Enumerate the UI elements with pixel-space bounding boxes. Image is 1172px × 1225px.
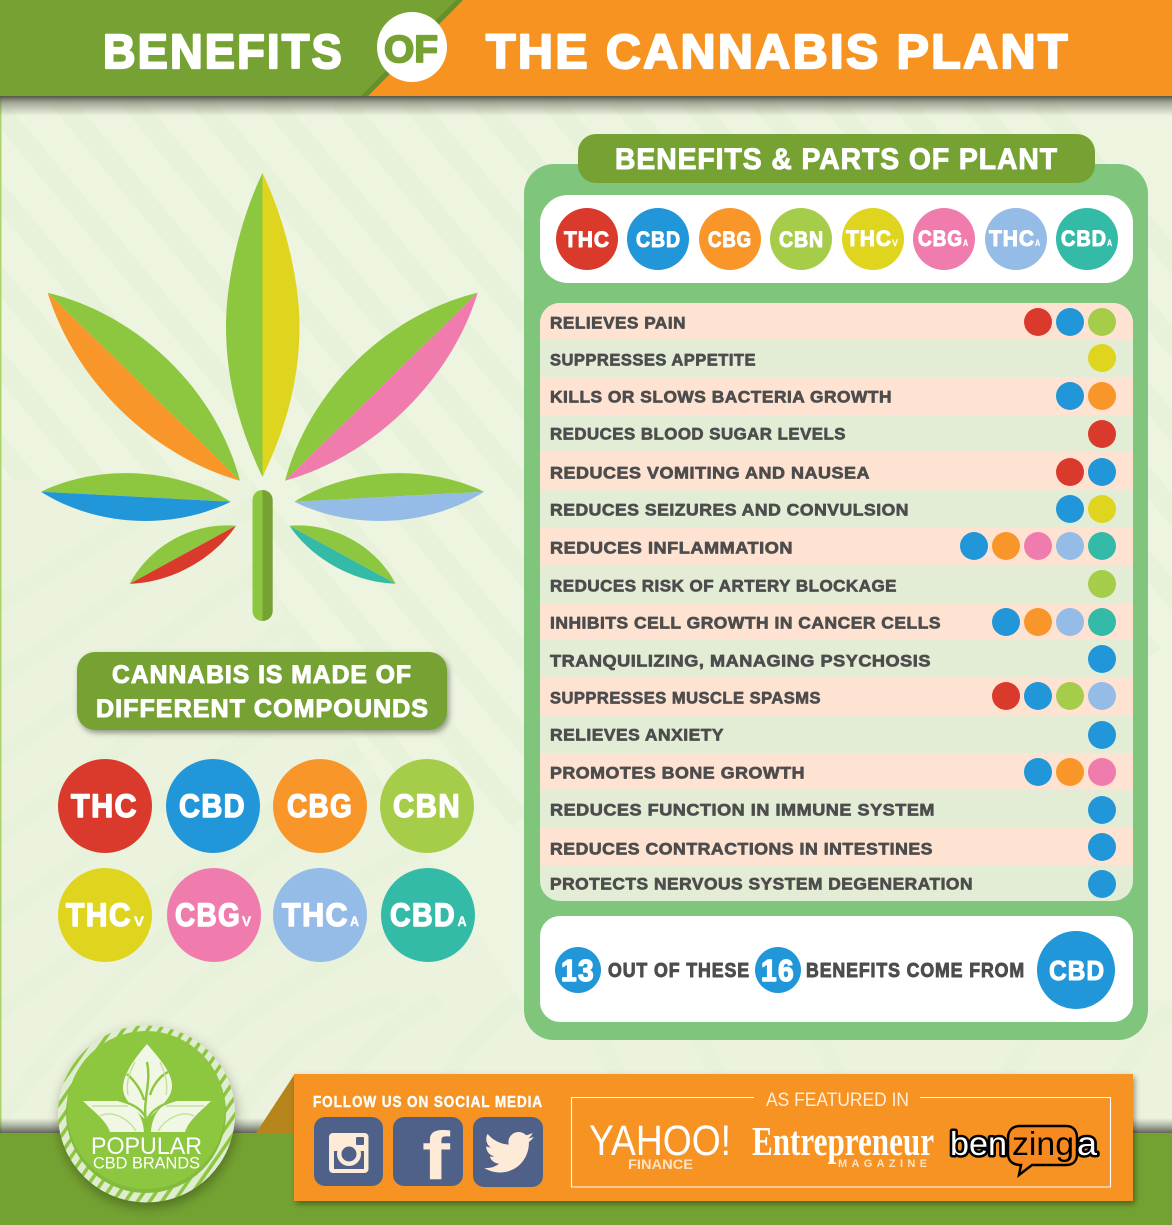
panel heading: BENEFITS & PARTS OF PLANT: [615, 143, 1058, 176]
badge disc: [67, 1031, 225, 1189]
logo: yahoo finance: FINANCE: [628, 1157, 693, 1172]
summary callout: [540, 916, 1133, 1022]
number 13: [555, 947, 601, 993]
row 10: TRANQUILIZING, MANAGING PSYCHOSIS: [550, 652, 931, 670]
header green: [0, 0, 463, 96]
THC: [58, 759, 152, 853]
compound legend: [540, 195, 1133, 283]
row 2: [550, 344, 1116, 372]
row 5: REDUCES VOMITING AND NAUSEA: [550, 464, 870, 482]
THCv: [58, 868, 152, 962]
legend CBD: CBD: [636, 227, 681, 252]
legend THCa: A: [1035, 238, 1041, 248]
CBGv: CBG: [175, 897, 241, 933]
footer orange panel: [294, 1074, 1133, 1201]
panel heading: [578, 134, 1095, 183]
CBDa: [381, 868, 475, 962]
compound circles: [58, 759, 475, 962]
panel background: [524, 164, 1148, 1040]
footer green: [0, 1133, 1172, 1225]
legend CBG: [699, 208, 761, 270]
logo: benzinga: a: [1077, 1125, 1098, 1162]
lower background wash: [0, 480, 1172, 1132]
badge ring: [58, 1026, 235, 1202]
number 16: 16: [761, 953, 795, 988]
diagonal shade: [361, 0, 463, 96]
row 15: [540, 828, 1133, 865]
logo: benzinga: [950, 1125, 1098, 1175]
upper right leaf: [285, 293, 478, 481]
stem: [252, 490, 273, 621]
row 7: REDUCES INFLAMMATION: [550, 538, 793, 558]
follow us text: FOLLOW US ON SOCIAL MEDIA: [313, 1094, 543, 1111]
CBDa: A: [458, 913, 468, 929]
footer band: [0, 1118, 1172, 1225]
icon: twitter: [473, 1117, 543, 1187]
legend CBGa: [913, 208, 975, 270]
legend CBDa: CBD: [1061, 226, 1107, 251]
footer panel fold: [256, 1075, 294, 1133]
upper left leaf: [48, 293, 240, 481]
row 14: [550, 796, 1116, 824]
CBG: [273, 759, 367, 853]
row 9: INHIBITS CELL GROWTH IN CANCER CELLS: [550, 614, 941, 632]
row 13: PROMOTES BONE GROWTH: [550, 764, 805, 782]
THCv: THC: [66, 897, 132, 933]
row 8: [550, 570, 1116, 598]
CBD: CBD: [179, 788, 246, 824]
legend CBDa: A: [1107, 238, 1113, 248]
table base: [540, 303, 1133, 901]
legend THCa: [985, 208, 1047, 270]
badge text popular: POPULAR: [91, 1133, 202, 1160]
as featured in frame: [572, 1098, 1110, 1187]
lower right leaf: [289, 525, 396, 584]
row 11: SUPPRESSES MUSCLE SPASMS: [550, 688, 821, 708]
row 12: RELIEVES ANXIETY: [550, 726, 724, 744]
logo: yahoo finance: YAHOO!: [589, 1117, 731, 1165]
benefits come from: BENEFITS COME FROM: [806, 960, 1025, 982]
row 3: KILLS OR SLOWS BACTERIA GROWTH: [550, 388, 892, 406]
row 5: [540, 452, 1133, 490]
icon: instagram: [314, 1117, 383, 1186]
THCv: V: [134, 913, 145, 929]
logo: entrepreneur magazine: Entrepreneur: [752, 1118, 934, 1164]
row 4: [550, 420, 1116, 448]
CBD circle: CBD: [1049, 955, 1105, 986]
callout box: [540, 916, 1133, 1022]
CBD: [166, 759, 260, 853]
footer shadow: [0, 1118, 1172, 1133]
row 7: [540, 528, 1133, 565]
footer panel: [294, 1074, 1133, 1201]
legend CBN: CBN: [779, 227, 824, 252]
header shadow: [0, 96, 1172, 116]
row 3: [540, 377, 1133, 415]
legend CBN: [770, 208, 832, 270]
legend THCv: V: [892, 238, 899, 248]
row 16: PROTECTS NERVOUS SYSTEM DEGENERATION: [550, 874, 973, 894]
logo: benzinga: zing: [1012, 1125, 1074, 1162]
CBDa: CBD: [390, 897, 456, 933]
heading line 2: DIFFERENT COMPOUNDS: [96, 695, 429, 723]
THCa: [273, 868, 367, 962]
CBN: CBN: [393, 788, 461, 824]
compounds heading: [77, 652, 447, 730]
legend CBDa: [1056, 208, 1118, 270]
row 16: [550, 870, 1116, 898]
middle right leaf: [294, 473, 484, 521]
legend CBG: CBG: [708, 227, 752, 252]
legend CBGa: CBG: [918, 226, 963, 251]
top leaf: [226, 173, 300, 477]
row 1: [540, 303, 1133, 340]
badge: popular cbd brands: [58, 1026, 235, 1202]
CBGv: [167, 868, 261, 962]
row 13: [540, 753, 1133, 790]
benefits table: [540, 303, 1133, 901]
row 6: REDUCES SEIZURES AND CONVULSION: [550, 500, 909, 520]
legend THCa: THC: [989, 226, 1035, 251]
cannabis leaf illustration: [41, 173, 484, 621]
legend THCv: [842, 208, 904, 270]
title: benefits: BENEFITS: [103, 26, 344, 79]
badge text cbd brands: CBD BRANDS: [93, 1154, 200, 1172]
THCa: THC: [282, 897, 349, 933]
row 12: [550, 721, 1116, 749]
row 4: REDUCES BLOOD SUGAR LEVELS: [550, 424, 846, 444]
legend THC: [556, 208, 618, 270]
row 1: RELIEVES PAIN: [550, 314, 686, 332]
row 2: SUPPRESSES APPETITE: [550, 350, 756, 370]
legend CBD: [627, 208, 689, 270]
row 10: [550, 645, 1116, 673]
legend CBGa: A: [963, 238, 969, 248]
THC: THC: [71, 788, 138, 824]
out of these: OUT OF THESE: [608, 960, 750, 982]
heading pill: [77, 652, 447, 730]
row 8: REDUCES RISK OF ARTERY BLOCKAGE: [550, 576, 897, 596]
row 14: REDUCES FUNCTION IN IMMUNE SYSTEM: [550, 800, 935, 820]
of text: OF: [384, 29, 438, 71]
number 13: 13: [561, 953, 595, 988]
badge disc shade: [66, 1033, 226, 1193]
left edge strip: [0, 96, 2, 1136]
logo: benzinga: ben: [950, 1125, 1007, 1162]
logo: entrepreneur magazine: MAGAZINE: [838, 1158, 927, 1170]
row 9: [540, 603, 1133, 640]
panel: benefits and parts of plant: [524, 134, 1148, 1040]
header orange: [0, 0, 1172, 96]
THCa: A: [350, 913, 360, 929]
CBD circle: [1037, 931, 1115, 1009]
number 16: [755, 947, 801, 993]
legend THC: THC: [564, 227, 610, 252]
heading line 1: CANNABIS IS MADE OF: [112, 661, 412, 689]
middle left leaf: [41, 473, 231, 521]
row 15: REDUCES CONTRACTIONS IN INTESTINES: [550, 840, 933, 858]
icon: facebook: f: [422, 1118, 450, 1194]
legend THCv: THC: [846, 226, 892, 251]
row 11: [540, 678, 1133, 715]
row 6: [550, 495, 1116, 523]
of badge: [377, 12, 447, 82]
header banner: [0, 0, 1172, 116]
of circle: [377, 12, 447, 82]
badge leaf logo: [83, 1044, 211, 1132]
lower left leaf: [130, 525, 236, 584]
CBN: [380, 759, 474, 853]
CBGv: V: [242, 913, 252, 929]
icon: facebook: [393, 1117, 463, 1194]
title: the cannabis plant: THE CANNABIS PLANT: [486, 26, 1070, 79]
as featured in label: AS FEATURED IN: [766, 1090, 909, 1111]
CBG: CBG: [287, 788, 353, 824]
logo: entrepreneur magazine: [752, 1118, 934, 1170]
